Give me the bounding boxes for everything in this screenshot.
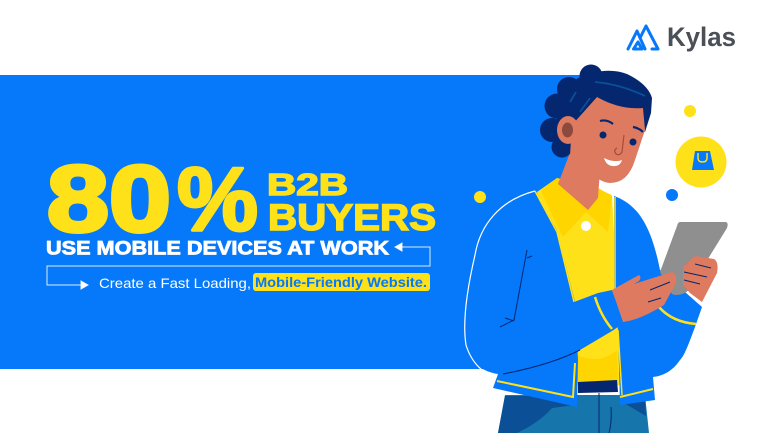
percent sign: % [177,150,258,250]
sleeve creases [500,250,580,374]
jeans [498,393,649,433]
nose [615,135,624,155]
jacket white outline [465,191,535,370]
panel: blue banner [0,75,580,369]
jacket [465,191,702,407]
face [557,97,645,183]
jacket right body [614,196,702,405]
shirt [537,178,622,393]
smile [604,158,622,166]
left hand [612,272,676,322]
tablet [660,222,728,295]
icon: shopping bag badge [676,136,726,188]
neck [558,150,600,210]
hair highlights [570,82,645,112]
eyebrows [600,120,643,132]
right cuff trim [659,307,696,324]
jacket left body [465,191,578,407]
collar [540,178,612,237]
ear [557,116,579,144]
dot: yellow left [474,191,486,203]
icon: mountain logo mark [628,26,658,49]
call to action text: Create a Fast Loading, [99,275,251,291]
arrow: connector from headline to call to action [47,243,430,289]
jacket yellow trim [497,191,653,397]
hair back curls [540,64,652,158]
inner ear [562,122,573,138]
number 80: 80 [47,146,171,251]
subheading: use mobile devices: USE MOBILE DEVICES AT WORK [46,238,389,260]
logo wordmark: Kylas [667,22,736,52]
illustration: man using tablet [465,64,728,433]
belt [578,380,618,393]
eyes [600,132,636,146]
heading: B2B: B2B [267,168,348,202]
headline: 80% [47,146,258,251]
dot: yellow top [684,105,696,117]
logo: Kylas [628,22,736,52]
dot: blue [666,189,678,201]
heading: BUYERS: BUYERS [268,196,436,238]
left cuff trim [595,297,612,329]
left sleeve [503,290,624,374]
right hand [683,256,718,302]
shirt button [581,221,591,231]
highlight: mobile friendly website: Mobile-Friendly Website. [255,275,427,290]
